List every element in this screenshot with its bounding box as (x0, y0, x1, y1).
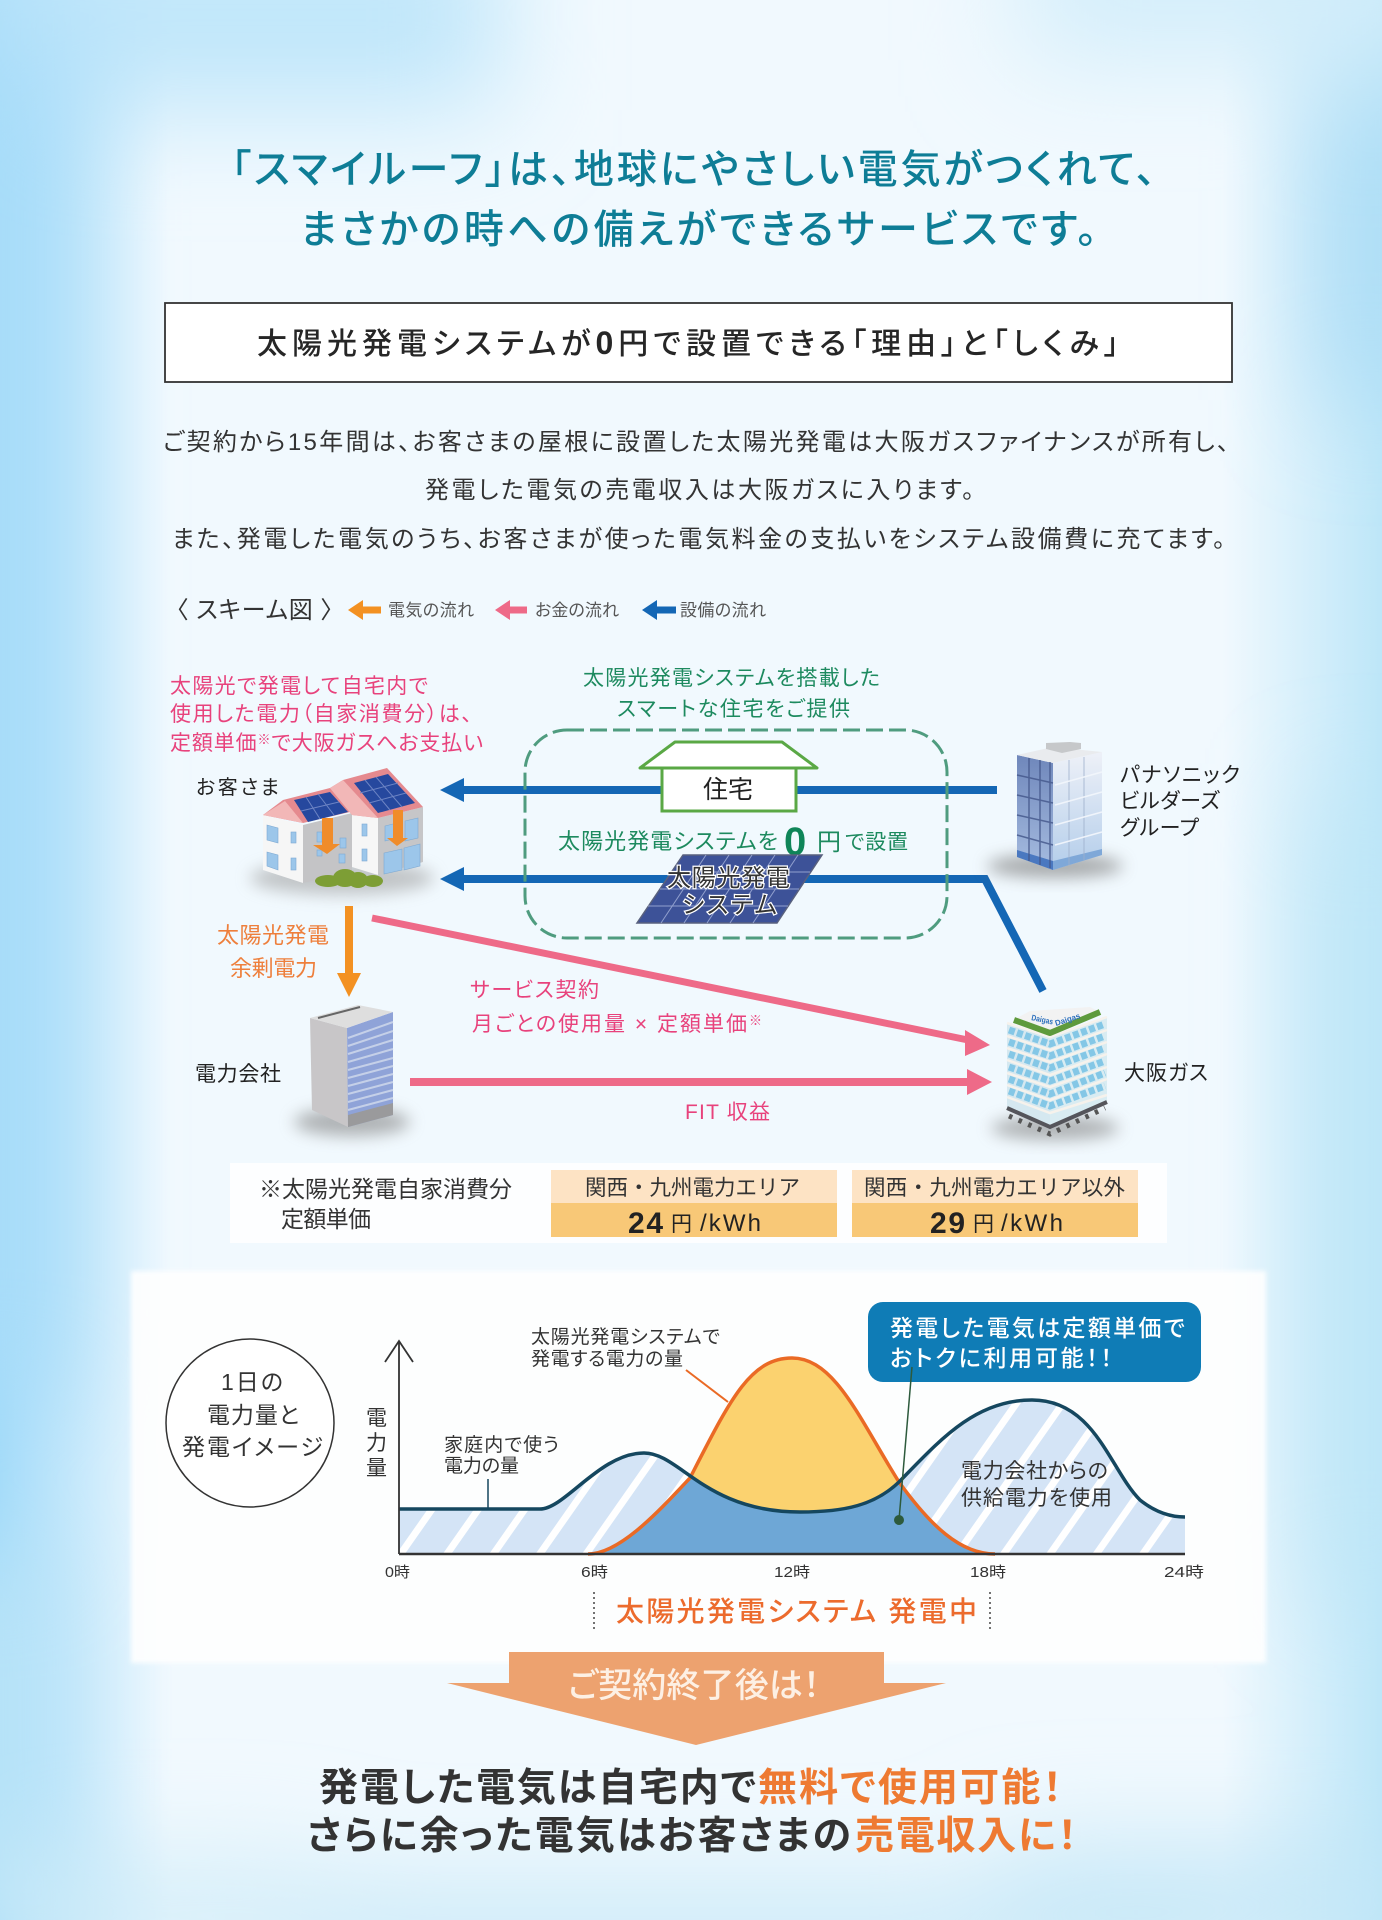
orange label: surplus power (217, 923, 329, 981)
pink label: service contract (470, 979, 762, 1036)
heading box: 太陽光発電システムが0円で設置できる「理由」と「しくみ」 (257, 325, 1119, 361)
closing message: 売電収入に！ (855, 1815, 1077, 1858)
axis label: power amount: 電 (366, 1407, 387, 1430)
flow arrow: service contract payment (372, 918, 990, 1056)
line: solar generation curve (588, 1358, 995, 1554)
arrow: after contract end: ご契約終了後は！ (568, 1667, 820, 1705)
label: household usage (444, 1434, 559, 1509)
label: household usage: 家庭内で使う (444, 1434, 559, 1456)
label: household usage: 電力の量 (444, 1455, 519, 1477)
icon: solar panel system: 太陽光発電 (667, 865, 790, 892)
axes (385, 1341, 1185, 1554)
text: zero yen installation: 0 (784, 820, 806, 864)
pink note: self consumption (170, 675, 483, 755)
label: utility supplied power: 電力会社からの (961, 1460, 1108, 1483)
label: utility supplied power: 供給電力を使用 (961, 1487, 1112, 1510)
legend: scheme diagram: 設備の流れ (680, 601, 766, 620)
flow arrow: surplus power to utility (337, 906, 361, 997)
pink note: self consumption: 太陽光で発電して自宅内で (170, 675, 428, 698)
green note: smart house: スマートな住宅をご提供 (617, 698, 850, 721)
text: zero yen installation: 円 (817, 829, 841, 856)
tick labels: hours: 18時 (970, 1564, 1006, 1581)
badge: daily power image: 1日の (221, 1369, 283, 1395)
label: Panasonic Builders Group: グループ (1120, 817, 1199, 840)
label: solar generation amount (531, 1326, 728, 1402)
intro paragraph (163, 429, 1229, 553)
text: zero yen installation: 太陽光発電システムを (558, 829, 778, 854)
legend: scheme diagram (176, 597, 766, 624)
closing message: 無料で使用可能！ (758, 1767, 1062, 1810)
pink label: service contract: ※ (749, 1013, 762, 1028)
cell: other areas: /kWh (1001, 1210, 1063, 1237)
label: solar generation amount: 太陽光発電システムで (531, 1326, 720, 1348)
green note: smart house: 太陽光発電システムを搭載した (583, 667, 880, 690)
closing message: さらに余った電気はお客さまの (307, 1815, 851, 1858)
pink label: service contract: 月ごとの使用量 × 定額単価 (472, 1013, 747, 1036)
area: household usage hatch (399, 1400, 1185, 1554)
pink note: self consumption: ※ (258, 732, 271, 747)
text: zero yen installation (558, 820, 908, 864)
cell: Kansai and Kyushu area: 関西・九州電力エリア (585, 1176, 800, 1200)
icon: solar panel system: システム (682, 892, 777, 919)
icon: simple house 住宅: 住宅 (703, 776, 753, 804)
title (231, 148, 1156, 252)
pink label: FIT revenue: FIT 収益 (685, 1101, 770, 1124)
icon: solar panel system (637, 855, 822, 923)
callout: fixed price benefit: おトクに利用可能！！ (890, 1345, 1112, 1371)
orange label: surplus power: 太陽光発電 (217, 923, 329, 948)
cell: other areas: 円 (973, 1213, 994, 1236)
icon: customer house with solar roof (250, 768, 434, 895)
line: household usage curve (399, 1400, 1185, 1517)
flow arrow: solar system from Osaka Gas to customer (440, 867, 1043, 991)
label: utility supplied power (961, 1460, 1112, 1510)
tick labels: hours: 6時 (581, 1564, 608, 1581)
intro paragraph: 発電した電気の売電収入は大阪ガスに入ります。 (425, 477, 974, 504)
callout: fixed price benefit (868, 1302, 1201, 1525)
icon: Osaka Gas building: Daigas (1031, 1013, 1054, 1027)
tick labels: hours: 24時 (1164, 1564, 1204, 1581)
title: まさかの時への備えができるサービスです。 (300, 208, 1097, 252)
arrow: after contract end (447, 1652, 946, 1745)
cell: other areas: 関西・九州電力エリア以外 (864, 1176, 1125, 1200)
axis label: power amount (366, 1407, 387, 1480)
closing message: 発電した電気は自宅内で (319, 1767, 756, 1810)
area: solar generation (588, 1358, 995, 1554)
panel: daily power chart (131, 1271, 1266, 1663)
cell: Kansai and Kyushu area (551, 1170, 837, 1240)
text: zero yen installation: で設置 (845, 831, 908, 854)
note: fixed unit price (259, 1176, 512, 1232)
label: solar generation amount: 発電する電力の量 (531, 1348, 683, 1370)
tick labels: hours: 0時 (385, 1564, 410, 1581)
tick labels: hours: 12時 (774, 1564, 810, 1581)
legend: scheme diagram: 〈 スキーム図 〉 (176, 597, 333, 624)
cell: other areas (852, 1170, 1138, 1240)
badge: daily power image: 発電イメージ (182, 1434, 323, 1460)
label: customer: お客さま (196, 776, 279, 799)
cell: Kansai and Kyushu area: 24 (628, 1207, 663, 1240)
label: Panasonic Builders Group: ビルダーズ (1120, 790, 1221, 813)
axis label: power amount: 量 (366, 1457, 387, 1480)
intro paragraph: また、発電した電気のうち、お客さまが使った電気料金の支払いをシステム設備費に充てます。 (172, 526, 1225, 553)
pink note: self consumption: 使用した電力（自家消費分）は、 (170, 703, 472, 726)
note: fixed unit price: 定額単価 (281, 1206, 371, 1232)
title: 「スマイルーフ」は、地球にやさしい電気がつくれて、 (231, 148, 1156, 192)
pink note: self consumption: 定額単価 (170, 732, 257, 755)
legend: scheme diagram: 電気の流れ (388, 601, 474, 620)
flow arrow: FIT revenue (410, 1069, 992, 1095)
tick labels: hours (385, 1564, 1204, 1581)
icon: Panasonic Builders building (987, 742, 1123, 878)
label: Osaka Gas: 大阪ガス (1124, 1062, 1208, 1085)
callout: fixed price benefit: 発電した電気は定額単価で (890, 1315, 1185, 1341)
pink note: self consumption: で大阪ガスへお支払い (271, 732, 483, 755)
pink label: service contract: サービス契約 (470, 979, 599, 1002)
note: fixed unit price: ※太陽光発電自家消費分 (259, 1176, 512, 1202)
panel: fixed unit price table (230, 1163, 1167, 1243)
label: Panasonic Builders Group (1120, 764, 1240, 840)
dashed panel: free installation (525, 730, 947, 938)
label: Panasonic Builders Group: パナソニック (1120, 764, 1240, 787)
icon: simple house 住宅 (640, 742, 817, 811)
icon: Osaka Gas building (991, 1007, 1119, 1140)
icon: Osaka Gas building: Daigas (1054, 1011, 1082, 1028)
closing message (307, 1767, 1077, 1858)
orange label: surplus power: 余剰電力 (230, 956, 317, 981)
icon: power company building (294, 1005, 410, 1136)
intro paragraph: ご契約から15年間は、お客さまの屋根に設置した太陽光発電は大阪ガスファイナンスが所有し、 (163, 429, 1229, 456)
axis label: power amount: 力 (366, 1432, 387, 1455)
cell: Kansai and Kyushu area: /kWh (700, 1210, 761, 1237)
area: self consumed solar (603, 1479, 976, 1553)
label: power company: 電力会社 (195, 1063, 281, 1086)
legend: scheme diagram: お金の流れ (535, 601, 619, 620)
green note: smart house (583, 667, 880, 721)
cell: Kansai and Kyushu area: 円 (671, 1213, 692, 1236)
cell: other areas: 29 (930, 1207, 965, 1240)
badge: daily power image (166, 1339, 334, 1507)
label: generating period: 太陽光発電システム 発電中 (616, 1596, 977, 1627)
heading box (165, 303, 1232, 382)
badge: daily power image: 電力量と (207, 1402, 299, 1428)
flow arrow: house to customer (440, 778, 997, 802)
